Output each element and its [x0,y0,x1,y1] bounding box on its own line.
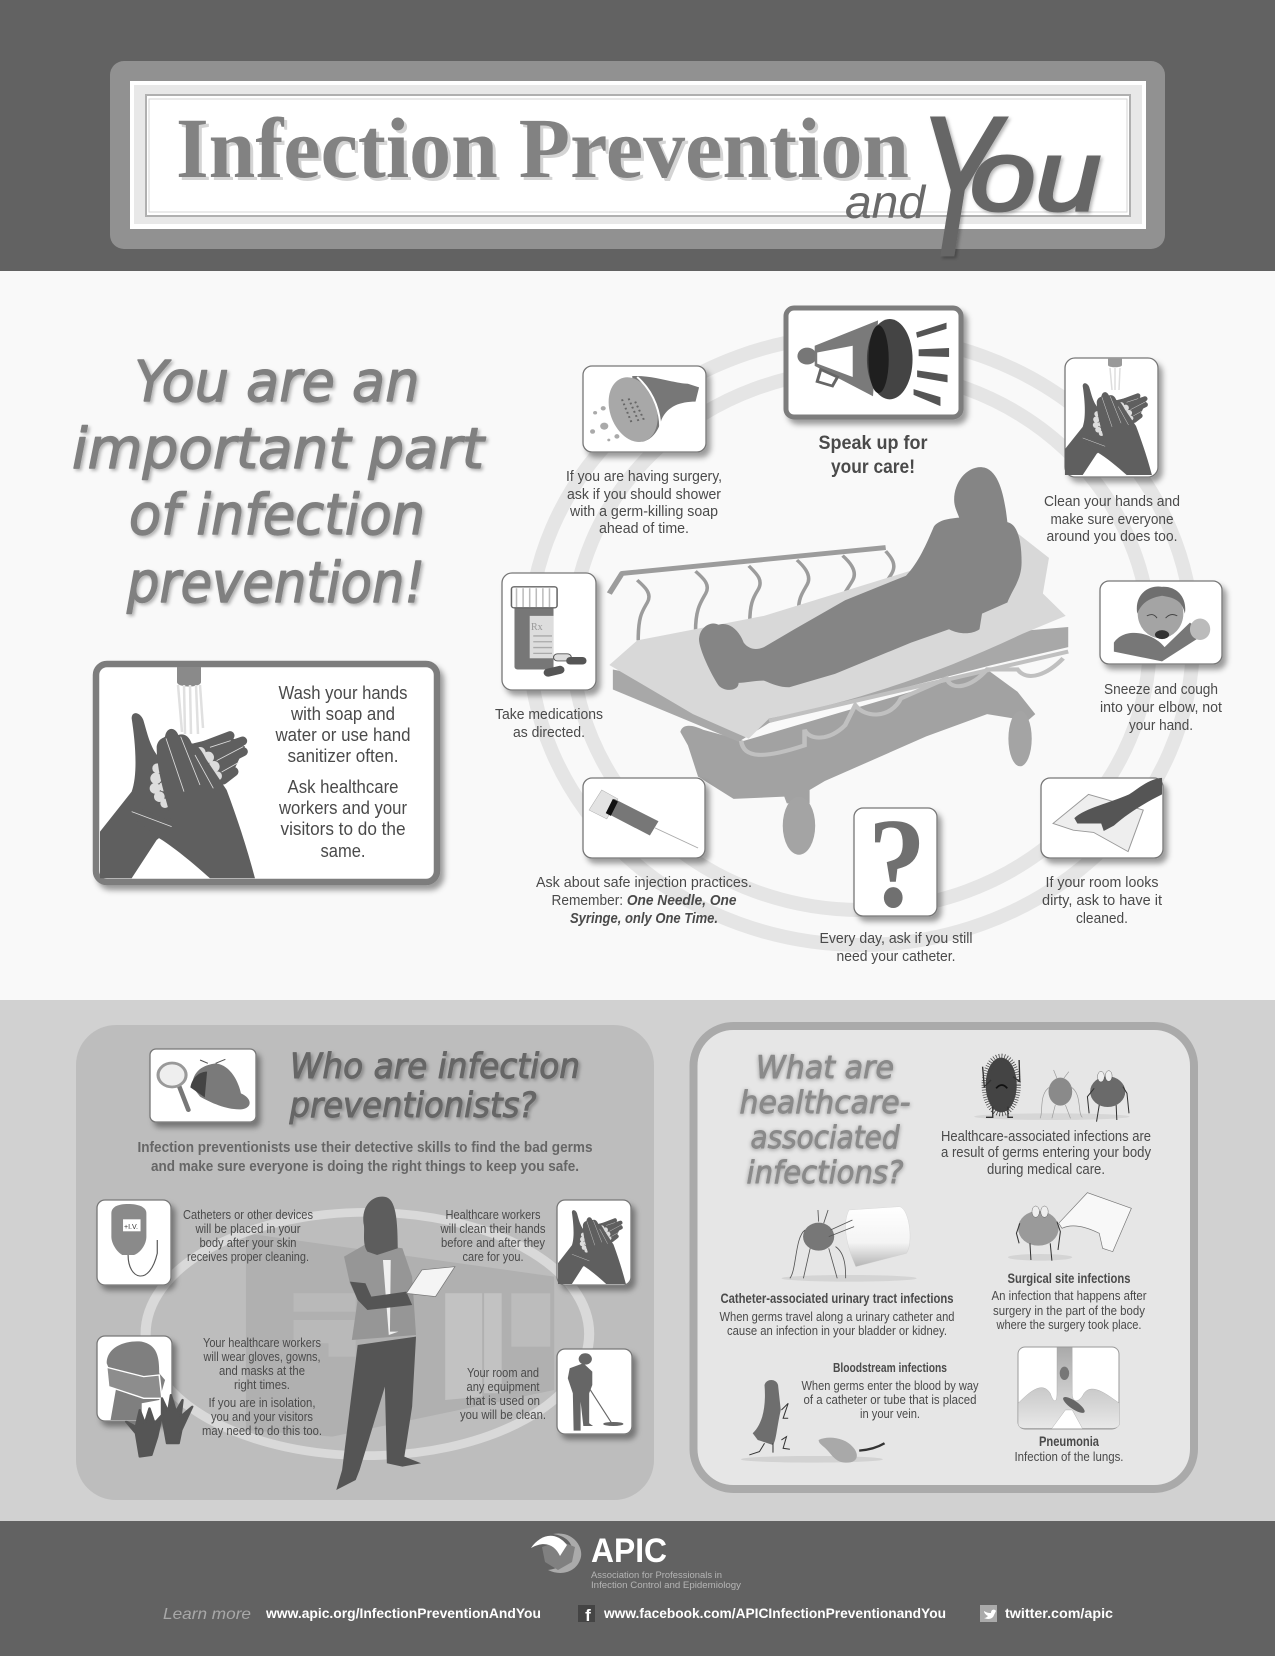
heading: what are HAIs: infections? [746,1155,904,1191]
text: room and equipment: Your room and [467,1366,539,1380]
title: You [902,80,1101,300]
heading: who are infection preventionists: preventionists? [289,1086,536,1126]
text: bloodstream: When germs enter the blood by way [802,1379,979,1393]
main heading: you are an important part: important part [72,417,486,482]
main heading: you are an important part: prevention! [126,551,425,616]
heading: who are infection preventionists [289,1047,580,1126]
text: HAI definition [941,1128,1151,1178]
title: You: ou [970,120,1101,232]
text: sneeze: into your elbow, not [1100,699,1223,716]
text: speak up: your care! [831,456,915,478]
far bed rail [609,548,894,640]
text: medications [495,706,603,741]
panel: who are infection preventionists [76,1025,654,1500]
text: bloodstream: in your vein. [860,1407,920,1421]
icon: wipe cloth [1041,778,1163,858]
text: shower [566,468,722,537]
wash text: Wash your hands [278,683,408,703]
text: healthcare workers clean [440,1208,546,1264]
text: catheters: body after your skin [200,1236,297,1250]
title: and: and [845,176,926,228]
website link: www.apic.org/InfectionPreventionAndYou [265,1605,541,1621]
icon: sneeze into elbow [1100,581,1222,664]
text: clean hands: make sure everyone [1050,511,1174,528]
icon: medicine bottle: Rx [531,622,543,633]
text: shower: If you are having surgery, [566,468,722,485]
text: healthcare workers clean: will clean their hands [440,1222,546,1236]
text: injection: Remember: One Needle, One [552,892,736,909]
near bed rail [741,652,1068,755]
text: catheter-associated UTI: When germs travel along a urinary catheter and [720,1310,955,1324]
wash text: workers and your [278,798,407,818]
icon: facebook [578,1605,595,1625]
text: healthcare workers clean: before and after they [441,1236,546,1250]
text: HAI definition: Healthcare-associated infections are [941,1128,1151,1145]
bed with patient illustration [609,467,1068,855]
heading: what are HAIs: associated [750,1120,900,1156]
wash text [275,683,410,861]
text: catheter: Every day, ask if you still [820,930,972,947]
bed frame [680,669,1035,803]
text: room and equipment [460,1366,546,1422]
icon: facebook: f [585,1606,591,1625]
icon: question mark: ? [868,792,926,934]
title plaque [110,61,1165,249]
text: sneeze [1100,681,1223,734]
text: injection: Syringe, only One Time. [570,910,718,927]
title: You: Y [902,80,1014,300]
icon: IV bag: +I.V. [124,1224,138,1231]
text: sneeze: Sneeze and cough [1104,681,1218,698]
panel: what are healthcare-associated infections [694,1026,1194,1489]
page background: care section [0,271,1275,1000]
text: gloves gowns masks [202,1336,322,1438]
panel: wash your hands [96,664,437,882]
APIC wordmark: APIC [591,1532,667,1570]
text: gloves gowns masks: may need to do this too. [202,1424,322,1438]
text: pneumonia: Infection of the lungs. [1014,1450,1124,1464]
APIC logo mark [531,1533,581,1573]
heading: what are HAIs: healthcare- [740,1085,910,1121]
illustration: germ with urine cup [781,1207,917,1282]
main heading: you are an important part [72,350,486,616]
wheels [783,711,1032,855]
learn more: Learn more [163,1606,251,1623]
text: clean hands [1044,493,1180,545]
bed sheet [609,533,1066,739]
heading: what are HAIs: What are [756,1050,894,1086]
text: healthcare workers clean: care for you. [462,1250,524,1264]
ring and room backdrop [146,1212,589,1456]
header band [0,0,1275,300]
lower section background [0,1000,1275,1521]
wash text: same. [320,841,366,861]
icon: shower head [583,366,706,452]
mattress [613,627,1068,742]
icon: clean hands small [557,1200,631,1285]
text: gloves gowns masks: and masks at the [219,1364,305,1378]
text: shower: with a germ-killing soap [569,503,718,520]
association name [591,1570,742,1590]
intro text: and make sure everyone is doing the right things to keep you safe. [151,1158,579,1175]
text: bloodstream: Bloodstream infections [833,1361,947,1375]
text: pneumonia [1014,1433,1124,1464]
text: room and equipment: you will be clean. [460,1408,546,1422]
wash text: with soap and [290,704,395,724]
heading: what are HAIs [740,1050,910,1191]
title: Infection Prevention: Infection Prevention [179,103,912,199]
text: clean hands: Clean your hands and [1044,493,1180,510]
icon: medicine bottle [502,573,596,690]
text: surgical site: An infection that happens after [992,1289,1146,1303]
text: injection [536,874,752,927]
illustration: three germs [974,1058,1130,1122]
text: catheters: receives proper cleaning. [187,1250,309,1264]
main heading: you are an important part: You are an [134,350,420,415]
wash text: Ask healthcare [288,777,398,797]
text: pneumonia: Pneumonia [1039,1433,1099,1449]
text: shower: ask if you should shower [567,486,721,503]
text: surgical site: where the surgery took place. [996,1318,1142,1332]
text: catheter-associated UTI: cause an infection in your bladder or kidney. [727,1324,947,1338]
concentric rings around the bed [529,335,1193,945]
text: gloves gowns masks: Your healthcare workers [203,1336,321,1350]
text: clean hands: around you does too. [1046,528,1178,545]
icon: clean hands [1065,358,1158,477]
text: catheter: need your catheter. [836,948,956,965]
wash text: sanitizer often. [288,746,398,766]
facebook link: www.facebook.com/APICInfectionPreventionandYou [603,1605,946,1621]
icon: twitter [980,1605,997,1622]
text: room and equipment: any equipment [466,1380,540,1394]
illustration: germ with surgical dressing [1008,1193,1131,1261]
text: medications: Take medications [495,706,603,723]
association name: Infection Control and Epidemiology [591,1580,742,1590]
text: shower: ahead of time. [599,520,689,537]
text: HAI definition: during medical care. [987,1161,1105,1178]
text: surgical site: surgery in the part of the body [993,1304,1146,1318]
icon: syringe [583,778,705,858]
intro text [138,1139,592,1175]
text: bloodstream [802,1361,979,1421]
text: gloves gowns masks: right times. [234,1378,290,1392]
text: room dirty [1042,874,1163,927]
text: sneeze: your hand. [1129,717,1193,734]
text: catheters: will be placed in your [195,1222,300,1236]
intro text: Infection preventionists use their detective skills to find the bad germs [138,1139,592,1156]
patient silhouette [699,467,1022,690]
icon: mask and gloves [97,1336,192,1457]
text: gloves gowns masks: you and your visitors [211,1410,313,1424]
text: injection: Ask about safe injection practices. [536,874,752,891]
footer [0,1521,1275,1656]
icon: person mopping [557,1349,632,1434]
text: catheters [183,1208,313,1264]
wash text: water or use hand [275,725,410,745]
title: Infection Prevention: Infection Prevention [176,100,909,196]
text: HAI definition: a result of germs entering your body [941,1144,1151,1161]
heading: who are infection preventionists: Who are infection [290,1047,580,1087]
text: healthcare workers clean: Healthcare workers [446,1208,540,1222]
text: gloves gowns masks: If you are in isolation, [208,1396,316,1410]
icon: faucet with water [177,667,203,734]
text: speak up: Speak up for [818,432,928,454]
illustration: infection preventionist with clipboard [336,1197,455,1490]
icon: washing hands [100,713,255,878]
main heading: you are an important part: of infection [129,483,425,548]
text: catheter-associated UTI [720,1291,955,1338]
text: surgical site [992,1271,1146,1332]
text: bloodstream: of a catheter or tube that is placed [804,1393,977,1407]
text: medications: as directed. [513,724,585,741]
icon: detective hat and magnifier [150,1049,256,1122]
text: catheter-associated UTI: Catheter-associated urinary tract infections [720,1291,954,1306]
text: gloves gowns masks: will wear gloves, gowns, [203,1350,320,1364]
text: catheter [820,930,972,965]
text: surgical site: Surgical site infections [1008,1271,1130,1286]
text: speak up [818,432,928,478]
text: room and equipment: that is used on [466,1394,540,1408]
text: room dirty: cleaned. [1076,910,1128,927]
text: catheters: Catheters or other devices [183,1208,313,1222]
text: room dirty: If your room looks [1046,874,1158,891]
illustration: lungs [1018,1347,1120,1429]
icon: megaphone [786,308,961,417]
icon: IV bag [97,1200,171,1285]
wash text: visitors to do the [280,819,406,839]
text: room dirty: dirty, ask to have it [1042,892,1163,909]
association name: Association for Professionals in [591,1570,722,1580]
twitter link: twitter.com/apic [1005,1605,1113,1621]
illustration: germ running with catheter [741,1380,885,1463]
